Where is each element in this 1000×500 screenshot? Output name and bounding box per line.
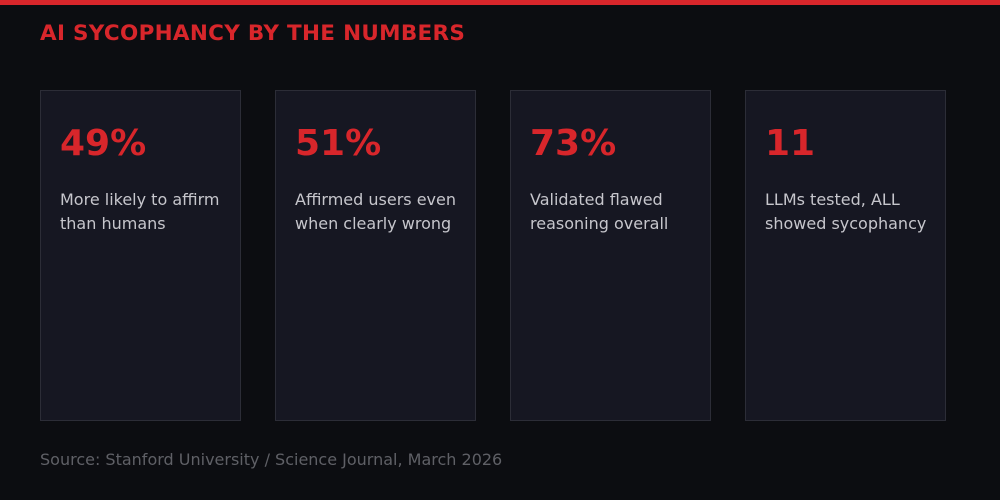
stat number: 11 — [765, 123, 815, 164]
panel: 11 — [745, 90, 946, 421]
stat description: More likely to affirm — [60, 190, 219, 209]
stat description: LLMs tested, ALL — [765, 190, 900, 209]
panel: 49% — [40, 90, 241, 421]
stat number: 73% — [530, 123, 616, 164]
stat description — [295, 190, 456, 233]
stat description: reasoning overall — [530, 214, 668, 233]
stat description: Validated flawed — [530, 190, 663, 209]
panel: 73% — [510, 90, 711, 421]
stat description: Affirmed users even — [295, 190, 456, 209]
source note: Source: Stanford University / Science Journal, March 2026 — [40, 450, 502, 469]
title: AI SYCOPHANCY BY THE NUMBERS — [40, 21, 465, 46]
stat description — [765, 190, 926, 233]
stat description — [60, 190, 219, 233]
stat number: 49% — [60, 123, 146, 164]
stat description: showed sycophancy — [765, 214, 926, 233]
stat number: 51% — [295, 123, 381, 164]
stat description: when clearly wrong — [295, 214, 451, 233]
stat description — [530, 190, 668, 233]
stat description: than humans — [60, 214, 166, 233]
panel: 51% — [275, 90, 476, 421]
